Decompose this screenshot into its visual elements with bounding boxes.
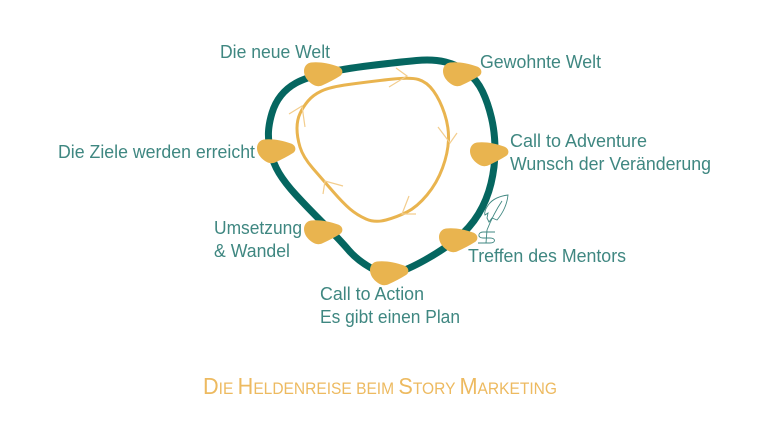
inner golden cycle loop — [297, 78, 449, 221]
inner loop arrows — [289, 68, 457, 214]
arrow: upper left — [289, 106, 305, 127]
label: Call to Adventure / Wunsch der Veränderung: Call to Adventure — [510, 130, 647, 151]
title: DIE HELDENREISE BEIM STORY MARKETING — [203, 373, 557, 399]
label: Treffen des Mentors: Treffen des Mentors — [468, 245, 626, 266]
label: Die Ziele werden erreicht: Die Ziele werden erreicht — [58, 141, 255, 162]
label: Umsetzung & Wandel: Umsetzung — [214, 217, 302, 238]
station: Die Ziele werden erreicht — [257, 139, 295, 163]
arrow: lower left — [323, 181, 343, 194]
label: Call to Action / Es gibt einen Plan: Call to Action — [320, 283, 424, 304]
arrow: top — [389, 68, 407, 87]
icon: quill and signature — [478, 195, 508, 243]
station: Treffen des Mentors — [439, 228, 477, 252]
label: Call to Adventure / Wunsch der Veränderung: Wunsch der Veränderung — [510, 153, 711, 174]
station: Umsetzung und Wandel — [304, 220, 342, 244]
station: Call to Adventure — [470, 142, 508, 166]
outer teal journey loop — [268, 60, 495, 274]
label: Call to Action / Es gibt einen Plan: Es gibt einen Plan — [320, 306, 460, 327]
label: Umsetzung & Wandel: & Wandel — [214, 240, 290, 261]
label: Die neue Welt: Die neue Welt — [220, 41, 330, 62]
arrow: right — [438, 127, 457, 143]
arrow: bottom — [402, 196, 416, 214]
label: Gewohnte Welt: Gewohnte Welt — [480, 51, 601, 72]
station: Gewohnte Welt — [443, 62, 481, 86]
station: Call to Action — [370, 261, 408, 285]
stations on the journey — [257, 62, 508, 285]
station: Die neue Welt — [304, 62, 342, 86]
